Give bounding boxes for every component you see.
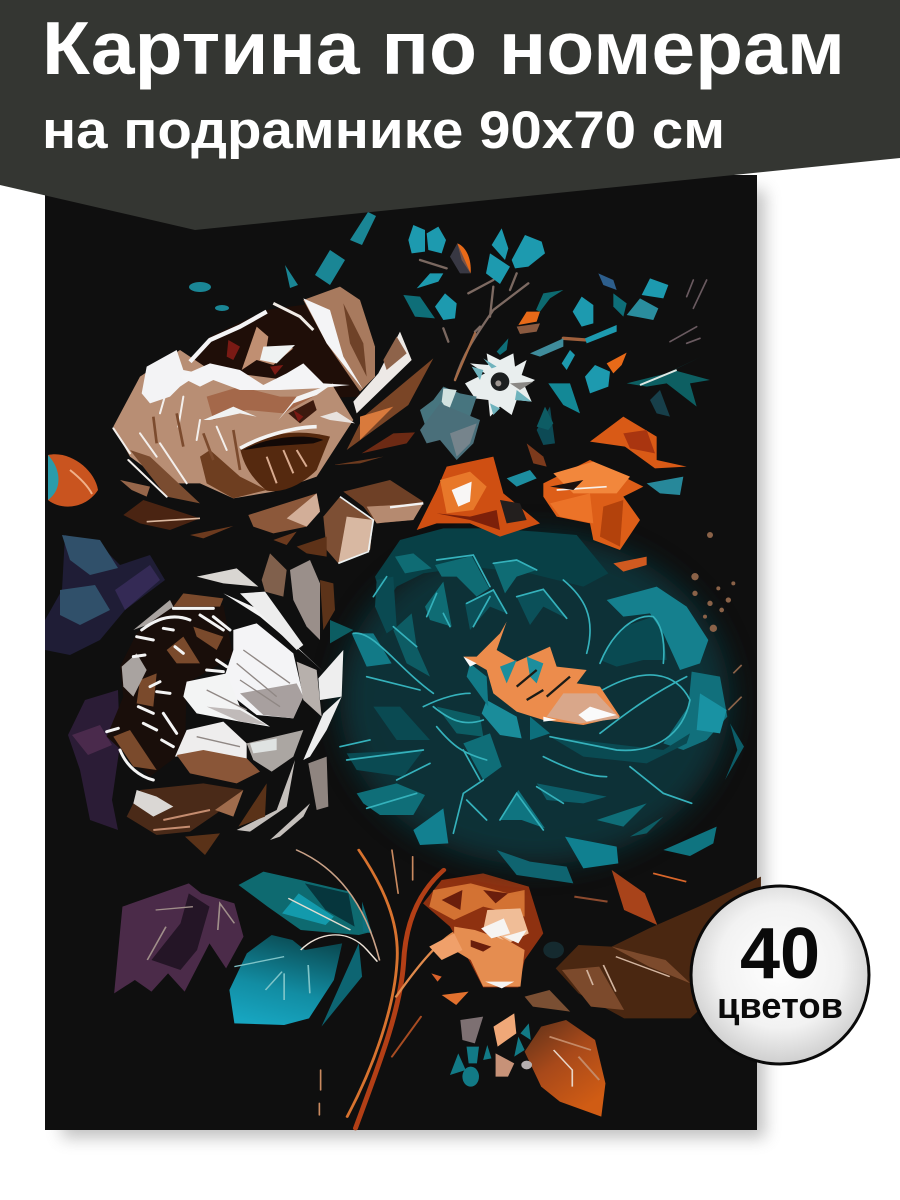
leaf: blue lower — [229, 935, 377, 1027]
header banner — [0, 0, 900, 230]
buds and small flowers — [403, 225, 710, 430]
flower centre orange — [463, 622, 620, 725]
peony white petals — [175, 553, 343, 840]
peony lower brown bowl — [240, 433, 330, 491]
brown peony — [113, 287, 433, 563]
teal flower — [330, 407, 744, 883]
peony lower brown petals — [127, 783, 267, 855]
peony tan body — [113, 350, 353, 498]
leaf: teal upper — [239, 872, 372, 935]
foliage: dark blue and purple, left — [45, 535, 165, 830]
subtitle: на подрамнике 90х70 см — [42, 101, 725, 160]
bud: left edge — [48, 454, 98, 507]
painting: floral bouquet — [45, 212, 761, 1128]
canvas shadow — [62, 190, 765, 1138]
badge: 40 colours — [691, 886, 869, 1064]
leaf: orange lower — [525, 1020, 605, 1117]
orange hydrangea — [423, 873, 564, 1087]
teal flower outlines — [340, 555, 692, 833]
teal flower glow — [340, 535, 730, 865]
small white flower — [465, 353, 535, 417]
sprigs: teal top left — [189, 212, 376, 311]
painting canvas — [45, 175, 757, 1130]
badge: 40 colours: 40 — [740, 914, 820, 994]
orange flowers — [417, 407, 742, 710]
badge: 40 colours: цветов — [717, 985, 843, 1026]
peony lower petals — [343, 480, 423, 523]
peony white ruffles — [142, 350, 200, 403]
leaf: brown right — [525, 870, 761, 1018]
flowers below the lavender bloom — [420, 403, 480, 460]
title: Картина по номерам — [42, 6, 845, 90]
leaf: purple — [114, 883, 244, 993]
bottom section: leaves, stems, hydrangea — [114, 850, 761, 1128]
small lavender flower — [420, 387, 478, 430]
stems — [297, 850, 458, 1128]
foliage: dark teal spray right — [627, 357, 710, 417]
white peony — [107, 553, 343, 855]
peony right petals — [303, 287, 375, 392]
